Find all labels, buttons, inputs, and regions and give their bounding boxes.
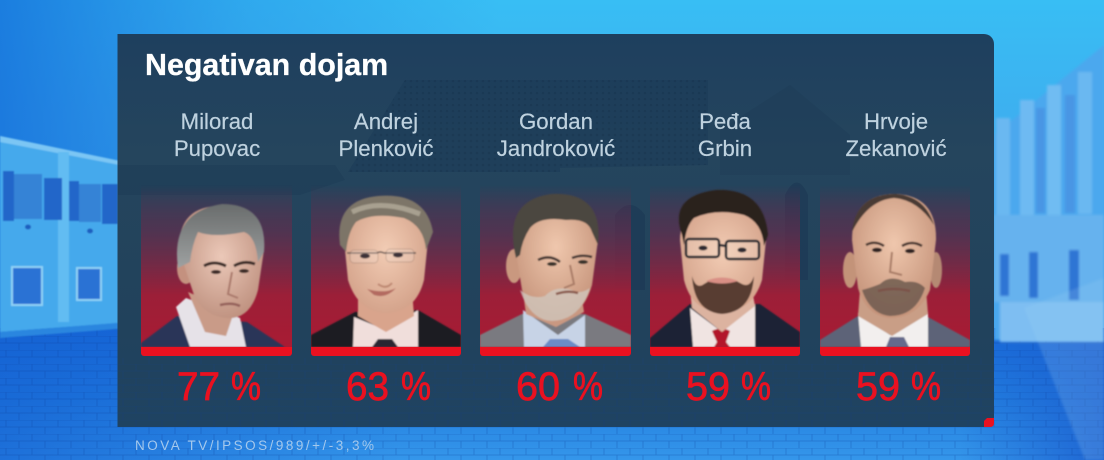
name: Hrvoje xyxy=(864,109,928,134)
panel cobblestones xyxy=(118,358,994,427)
photo card xyxy=(650,185,800,347)
red bar xyxy=(650,347,800,356)
name: Pupovac xyxy=(174,136,260,161)
red bar xyxy=(480,347,631,356)
corner accent xyxy=(984,418,994,427)
main dark panel xyxy=(118,34,994,427)
church roof seen through panel xyxy=(118,80,850,290)
percentage: % xyxy=(231,365,261,409)
red bar xyxy=(311,347,461,356)
photo card xyxy=(480,185,631,347)
percentage: 77 xyxy=(177,365,220,409)
source line: NOVA TV/IPSOS/989/+/-3,3% xyxy=(135,438,374,453)
background: left building xyxy=(0,136,130,338)
name: Peđa xyxy=(699,109,751,134)
percentage: % xyxy=(741,365,771,409)
photo card xyxy=(820,185,970,347)
candidate: Milorad Pupovac xyxy=(141,109,292,409)
name: Plenković xyxy=(339,136,433,161)
name: Grbin xyxy=(698,136,752,161)
name: Gordan xyxy=(519,109,593,134)
percentage: % xyxy=(401,365,431,409)
candidate: Peđa Grbin xyxy=(650,109,800,409)
red bar xyxy=(820,347,970,356)
title: Negativan dojam xyxy=(145,48,388,82)
candidate: Gordan Jandroković xyxy=(480,109,631,409)
percentage: % xyxy=(573,365,603,409)
photo card xyxy=(311,185,461,347)
percentage: 59 xyxy=(686,365,730,409)
background: right building xyxy=(994,45,1104,460)
name: Milorad xyxy=(181,109,253,134)
percentage: % xyxy=(911,365,941,409)
candidate: Hrvoje Zekanović xyxy=(820,109,970,409)
name: Zekanović xyxy=(845,136,947,161)
percentage: 63 xyxy=(346,365,389,409)
name: Andrej xyxy=(354,109,418,134)
name: Jandroković xyxy=(497,136,615,161)
red bar xyxy=(141,347,292,356)
percentage: 60 xyxy=(516,365,560,409)
percentage: 59 xyxy=(856,365,900,409)
photo card xyxy=(141,185,292,347)
candidate: Andrej Plenković xyxy=(311,109,461,409)
